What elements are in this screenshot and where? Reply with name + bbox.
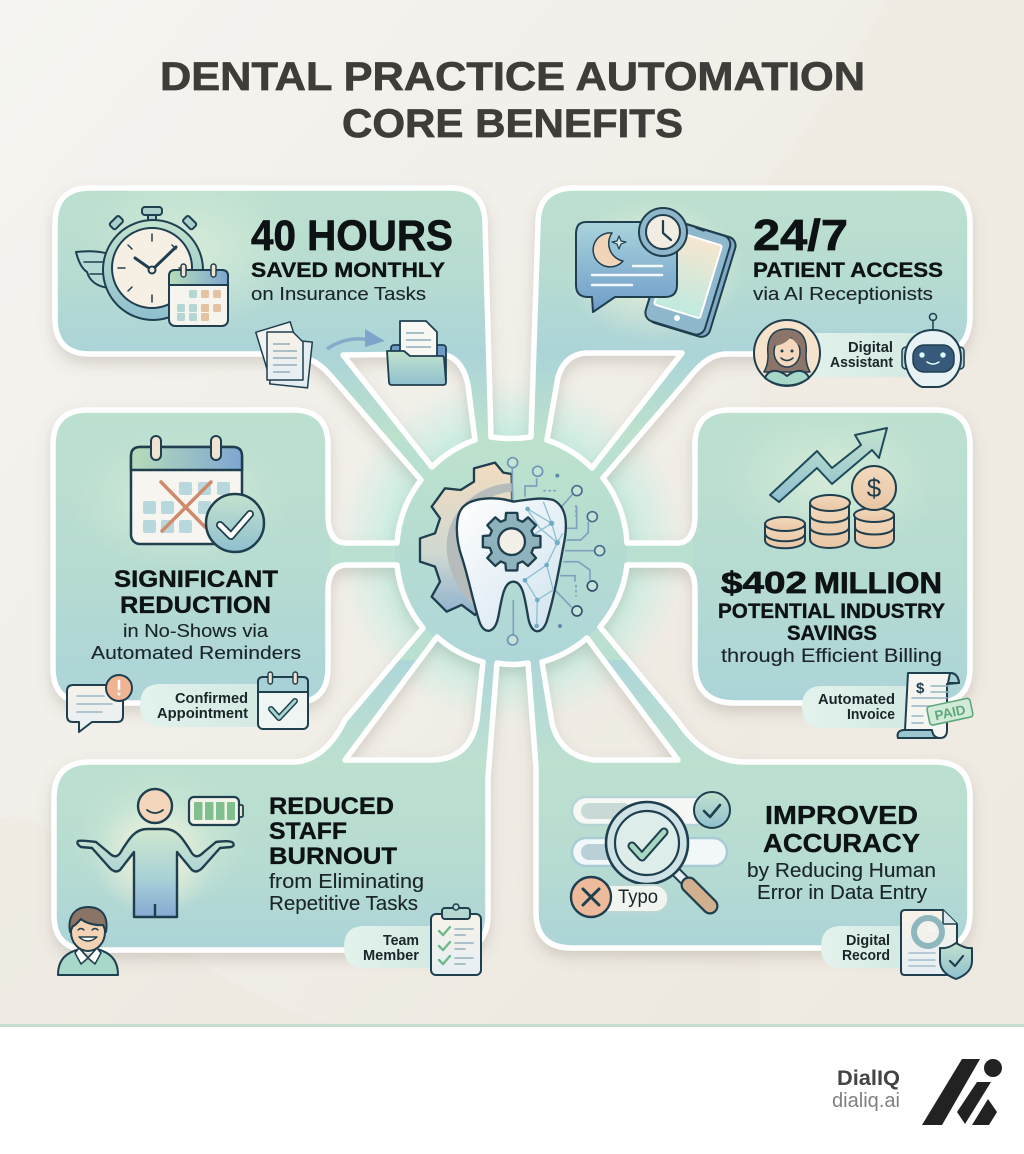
label pill: digital record <box>821 926 910 968</box>
icon: glowing chat and phone <box>565 198 745 342</box>
body text <box>747 860 936 904</box>
panel: 40 hours saved <box>54 188 486 388</box>
icon: checklist clipboard <box>431 904 481 975</box>
coin stacks: $ <box>867 473 882 503</box>
icon: paid invoice <box>898 673 973 738</box>
footer brand text <box>832 1067 900 1112</box>
icon: folder <box>387 321 446 385</box>
icon: calendar <box>169 264 228 326</box>
circuit nodes <box>508 458 605 645</box>
body text: through Efficient Billing <box>721 646 942 667</box>
icon: confirmed calendar <box>258 672 308 729</box>
magnifying glass <box>606 802 710 906</box>
check badge <box>694 792 730 828</box>
body text: on Insurance Tasks <box>251 283 426 304</box>
heading: reduced staff burnout <box>269 793 397 870</box>
hub halo glow <box>336 375 686 725</box>
label pill: digital assistant <box>790 333 930 377</box>
heading: improved accuracy: IMPROVED <box>765 800 918 830</box>
panel: 24/7 patient access <box>537 188 971 387</box>
inner gear ring <box>447 483 512 607</box>
label pill: confirmed appointment <box>140 684 265 727</box>
label pill: confirmed appointment: Appointment <box>157 706 248 722</box>
typo pill: Typo <box>618 887 658 908</box>
icon: winged stopwatch <box>76 207 203 320</box>
small gear <box>483 513 540 570</box>
panel: significant reduction <box>52 409 330 732</box>
heading: reduced staff burnout: REDUCED <box>269 793 394 820</box>
heading: significant reduction: SIGNIFICANT <box>114 566 278 593</box>
title: CORE BENEFITS <box>342 102 683 146</box>
title <box>160 55 865 146</box>
icon: reminder message <box>67 675 132 732</box>
heading: significant reduction <box>114 566 278 619</box>
body text: via AI Receptionists <box>753 283 933 304</box>
subheading: potential industry savings: POTENTIAL INDUSTRY <box>718 600 945 623</box>
connected panel shape with hub and arms <box>50 170 973 952</box>
body text: by Reducing Human <box>747 860 936 882</box>
heading: reduced staff burnout: STAFF <box>269 818 347 845</box>
heading: $402 million <box>721 565 942 600</box>
heading: improved accuracy: ACCURACY <box>763 828 920 858</box>
icon: paper documents <box>256 322 312 388</box>
icon: receptionist avatar <box>754 320 820 386</box>
label pill: digital record: Record <box>842 948 890 964</box>
tooth <box>457 498 566 631</box>
body text: Automated Reminders <box>91 642 301 663</box>
footer brand text: DialIQ <box>837 1067 900 1090</box>
icon: team member avatar <box>58 907 118 975</box>
icon: secure digital record <box>901 910 972 979</box>
logo: DialIQ mark <box>922 1059 1002 1125</box>
label pill: confirmed appointment: Confirmed <box>175 691 248 707</box>
subheading: potential industry savings <box>718 600 945 645</box>
icon: calendar with cross and check <box>131 436 264 552</box>
heading: reduced staff burnout: BURNOUT <box>269 843 397 870</box>
body text: Repetitive Tasks <box>269 893 418 915</box>
icon: robot assistant <box>902 314 964 387</box>
label pill: team member <box>344 926 440 968</box>
tooth network <box>525 502 563 627</box>
typo pill <box>571 877 668 917</box>
footer brand text: dialiq.ai <box>832 1090 900 1112</box>
panel: improved accuracy <box>536 762 972 979</box>
body text: Error in Data Entry <box>757 882 927 904</box>
icon: relaxed staff figure <box>77 789 234 918</box>
subheading: potential industry savings: SAVINGS <box>787 622 877 645</box>
icon: data fields with magnifier <box>571 792 730 917</box>
icon: full battery <box>189 797 243 825</box>
panel: reduced staff burnout <box>54 762 488 975</box>
large gear <box>420 463 513 615</box>
icon: paid invoice: PAID <box>933 702 967 723</box>
body text <box>91 620 301 663</box>
body text <box>269 871 424 915</box>
heading: 24/7: 24/7 <box>753 211 848 260</box>
body text: from Eliminating <box>269 871 424 893</box>
data entry fields <box>572 797 720 825</box>
heading: 40 hours: 40 HOURS <box>251 212 453 260</box>
footer band <box>0 1024 1024 1154</box>
icon: rising arrow with coins <box>765 428 896 548</box>
body text: in No-Shows via <box>123 620 269 641</box>
heading: significant reduction: REDUCTION <box>120 592 271 619</box>
heading: $402 million: MILLION <box>814 567 942 600</box>
label pill: digital assistant: Assistant <box>830 355 893 371</box>
title: DENTAL PRACTICE AUTOMATION <box>160 55 865 99</box>
subheading: patient access: PATIENT ACCESS <box>753 259 943 282</box>
label pill: team member: Member <box>363 948 419 964</box>
arrow: documents to folder <box>327 329 385 349</box>
heading: $402 million: $402 <box>721 565 807 600</box>
rising arrow <box>770 428 887 502</box>
label pill: automated invoice <box>802 686 915 728</box>
label pill: digital record: Digital <box>846 933 890 949</box>
panel: $402 million savings <box>693 409 973 738</box>
subheading: saved monthly: SAVED MONTHLY <box>251 259 445 282</box>
label pill: team member: Team <box>383 933 419 949</box>
icon: paid invoice: $ <box>916 680 925 697</box>
circuit lines <box>512 468 595 635</box>
label pill: digital assistant: Digital <box>848 340 893 356</box>
label pill: automated invoice: Automated <box>818 692 895 708</box>
heading: improved accuracy <box>763 800 920 858</box>
central hub icon: tooth, gear and circuits <box>420 458 605 645</box>
label pill: automated invoice: Invoice <box>847 707 895 723</box>
